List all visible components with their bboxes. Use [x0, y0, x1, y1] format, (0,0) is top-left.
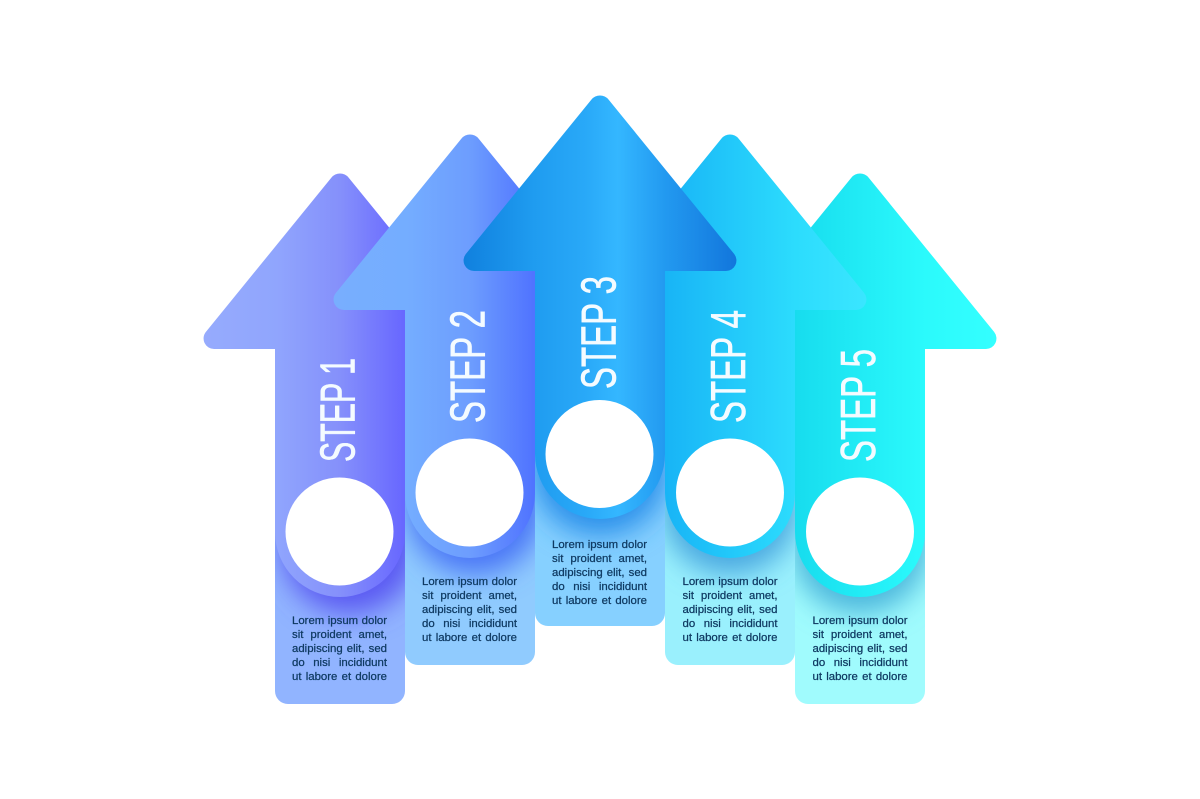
- arrow: step 5: [795, 174, 996, 704]
- description: step 1: Lorem ipsum dolor: [292, 615, 387, 627]
- text panel: step 3: [535, 422, 665, 626]
- description: step 5: adipiscing elit, sed: [812, 643, 908, 655]
- label: step 1: STEP 1: [312, 358, 366, 462]
- description: step 4: adipiscing elit, sed: [682, 604, 778, 616]
- arrow body: step 2: [334, 134, 606, 558]
- description: step 2: do nisi incididunt: [422, 618, 517, 630]
- description: step 2: ut labore et dolore: [422, 632, 517, 644]
- description: step 3: ut labore et dolore: [552, 594, 647, 606]
- arrow body: step 3: [464, 95, 736, 519]
- arrow: step 3: [464, 95, 736, 626]
- description: step 2: Lorem ipsum dolor: [422, 576, 517, 588]
- description: step 1: [292, 614, 388, 686]
- arrow: step 4: [665, 134, 866, 665]
- description: step 4: Lorem ipsum dolor: [682, 576, 778, 588]
- circle: step 3: [546, 400, 654, 508]
- description: step 5: sit proident amet,: [812, 629, 908, 641]
- circle: step 2: [416, 438, 524, 546]
- label: step 5: STEP 5: [832, 349, 886, 462]
- text panel: step 1: [275, 500, 405, 704]
- description: step 2: sit proident amet,: [422, 590, 517, 602]
- text panel: step 5: [795, 500, 925, 704]
- description: step 5: do nisi incididunt: [812, 657, 908, 669]
- infographic: five step arrows: [204, 96, 996, 704]
- label: step 2: STEP 2: [442, 310, 496, 423]
- description: step 2: adipiscing elit, sed: [422, 604, 517, 616]
- shadow: step 1: [275, 533, 405, 631]
- circle: step 4: [676, 438, 784, 546]
- description: step 5: [812, 614, 908, 686]
- arrow body: step 1: [204, 173, 476, 597]
- description: step 1: ut labore et dolore: [292, 671, 387, 683]
- description: step 4: [682, 575, 778, 647]
- description: step 4: sit proident amet,: [682, 590, 778, 602]
- shadow: step 5: [795, 534, 925, 630]
- circle: step 5: [806, 478, 914, 586]
- text panel: step 2: [405, 461, 535, 665]
- description: step 3: [552, 538, 648, 610]
- description: step 3: adipiscing elit, sed: [552, 566, 647, 578]
- description: step 3: sit proident amet,: [552, 552, 647, 564]
- description: step 1: sit proident amet,: [292, 629, 387, 641]
- description: step 4: ut labore et dolore: [682, 632, 778, 644]
- text panel: step 4: [665, 461, 795, 665]
- description: step 1: do nisi incididunt: [292, 657, 387, 669]
- description: step 3: do nisi incididunt: [552, 580, 647, 592]
- arrow: step 1: [204, 174, 405, 704]
- shadow: step 4: [665, 495, 795, 590]
- label: step 4: STEP 4: [702, 310, 756, 423]
- description: step 3: Lorem ipsum dolor: [552, 538, 647, 550]
- shadow: step 3: [535, 456, 665, 555]
- circle: step 1: [286, 478, 394, 586]
- shadow: step 2: [405, 494, 535, 592]
- description: step 4: do nisi incididunt: [682, 618, 778, 630]
- description: step 5: ut labore et dolore: [812, 671, 908, 683]
- description: step 2: [422, 575, 518, 647]
- description: step 1: adipiscing elit, sed: [292, 643, 387, 655]
- description: step 5: Lorem ipsum dolor: [812, 615, 908, 627]
- arrow: step 2: [334, 134, 535, 665]
- arrow body: step 4: [594, 134, 866, 558]
- label: step 3: STEP 3: [572, 276, 626, 389]
- arrow body: step 5: [724, 173, 996, 597]
